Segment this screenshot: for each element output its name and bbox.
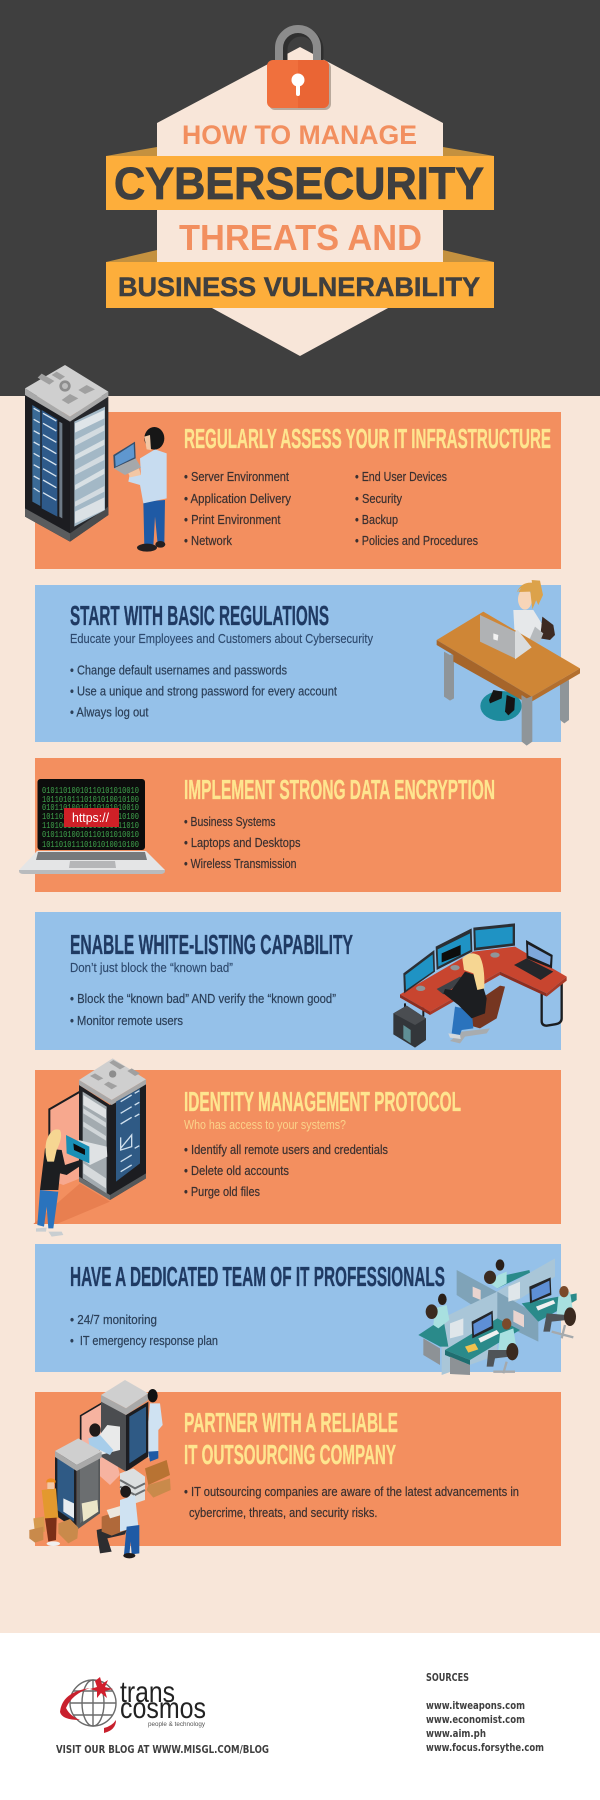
panel: header [0, 0, 600, 396]
sources [426, 1671, 544, 1754]
bullet list: • IT emergency response plan [70, 1333, 218, 1348]
bullet list: • Identify all remote users and credentials [184, 1142, 388, 1157]
ribbon: cybersecurity: CYBERSECURITY [114, 158, 484, 209]
icon: globe [70, 1680, 116, 1726]
title line: how to manage: HOW TO MANAGE [182, 120, 417, 150]
sources: www.aim.ph [426, 1727, 486, 1740]
icon: laptop with https: https:// [72, 810, 109, 825]
heading [184, 1407, 398, 1470]
icon: red star [90, 1677, 113, 1698]
bullet list left: • Server Environment [184, 469, 289, 484]
body text: cybercrime, threats, and security risks. [189, 1505, 378, 1520]
panel: white-listing [35, 912, 567, 1050]
ribbon: business vulnerability [106, 250, 494, 308]
icon: office cubicles team [418, 1258, 577, 1375]
body text: • IT outsourcing companies are aware of the latest advancements in [184, 1484, 519, 1499]
heading: IT OUTSOURCING COMPANY [184, 1439, 396, 1470]
bullet list: • Use a unique and strong password for every account [70, 684, 337, 698]
hexagon badge [157, 47, 443, 356]
bullet list [70, 1312, 218, 1348]
bullet list: • Wireless Transmission [184, 856, 296, 871]
blog link: VISIT OUR BLOG AT WWW.MISGL.COM/BLOG [56, 1743, 269, 1756]
icon: woman at multi-monitor desk [393, 923, 567, 1048]
panel: footer [0, 1633, 600, 1800]
bullet list: • Change default usernames and passwords [70, 662, 287, 678]
icon: server rack and man with laptop [25, 365, 167, 552]
logo: transcosmos [60, 1676, 206, 1733]
panel: data encryption [19, 758, 561, 892]
sources: www.focus.forsythe.com [426, 1741, 544, 1754]
subheading: Don’t just block the “known bad” [70, 960, 233, 975]
bullet list: • Purge old files [184, 1184, 260, 1199]
bullet list right: • Backup [355, 512, 398, 527]
bullet list left [184, 469, 291, 548]
bullet list left: • Network [184, 533, 232, 548]
bullet list right: • Security [355, 491, 402, 506]
binary code on screen: 01011010010110101010010 [42, 830, 139, 840]
logo: transcosmos: trans [120, 1676, 175, 1709]
icon: woman at desk [437, 580, 580, 746]
binary code on screen [42, 786, 139, 850]
binary code on screen: 01011010010110101010010 [42, 803, 139, 813]
binary code on screen: 10110101110101010010100 [42, 840, 139, 850]
bullet list [70, 991, 336, 1028]
icon: padlock [267, 29, 331, 110]
bullet list [184, 814, 301, 871]
bullet list [184, 1142, 388, 1199]
sources: www.economist.com [426, 1713, 525, 1726]
panel: identity management [33, 1058, 561, 1237]
bullet list left: • Print Environment [184, 512, 281, 527]
subheading: Educate your Employees and Customers about Cybersecurity [70, 631, 373, 646]
subheading: Who has access to your systems? [184, 1117, 346, 1132]
logo: transcosmos: cosmos [120, 1692, 206, 1725]
binary code on screen: 10110101110101010010100 [42, 812, 139, 822]
panel: regularly assess [25, 365, 561, 569]
icon: laptop with https [19, 779, 165, 874]
bullet list: • Laptops and Desktops [184, 835, 301, 850]
bullet list: • Business Systems [184, 814, 276, 829]
bullet list right [355, 469, 478, 548]
sources: www.itweapons.com [426, 1699, 525, 1712]
bullet list right: • Policies and Procedures [355, 533, 478, 548]
icon: red swoosh [60, 1688, 116, 1733]
sources: SOURCES [426, 1671, 469, 1684]
panel: basic regulations [35, 580, 580, 746]
body text [184, 1484, 519, 1520]
bullet list: • Block the “known bad” AND verify the “known good” [70, 991, 336, 1006]
icon: data centre workers and servers [29, 1380, 171, 1558]
panel: partner with outsourcing [29, 1380, 561, 1558]
icon: server rack and woman [33, 1058, 146, 1237]
heading: START WITH BASIC REGULATIONS [70, 600, 329, 631]
bullet list right: • End User Devices [355, 469, 447, 484]
binary code on screen: 10110101110101010010100 [42, 795, 139, 805]
heading: ENABLE WHITE-LISTING CAPABILITY [70, 929, 353, 960]
binary code on screen: 11010010110101010011010 [42, 821, 139, 831]
bullet list: • Delete old accounts [184, 1163, 289, 1178]
logo: transcosmos: people & technology [148, 1721, 206, 1728]
bullet list left: • Application Delivery [184, 491, 291, 506]
binary code on screen: 01011010010110101010010 [42, 786, 139, 796]
panel: dedicated team [35, 1244, 577, 1375]
bullet list [70, 662, 337, 720]
ribbon: business vulnerability: BUSINESS VULNERABILITY [118, 272, 480, 302]
heading: PARTNER WITH A RELIABLE [184, 1407, 398, 1438]
title line: threats and: THREATS AND [179, 217, 422, 258]
bullet list: • Always log out [70, 704, 149, 720]
bullet list: • Monitor remote users [70, 1013, 183, 1028]
bullet list: • 24/7 monitoring [70, 1312, 157, 1327]
